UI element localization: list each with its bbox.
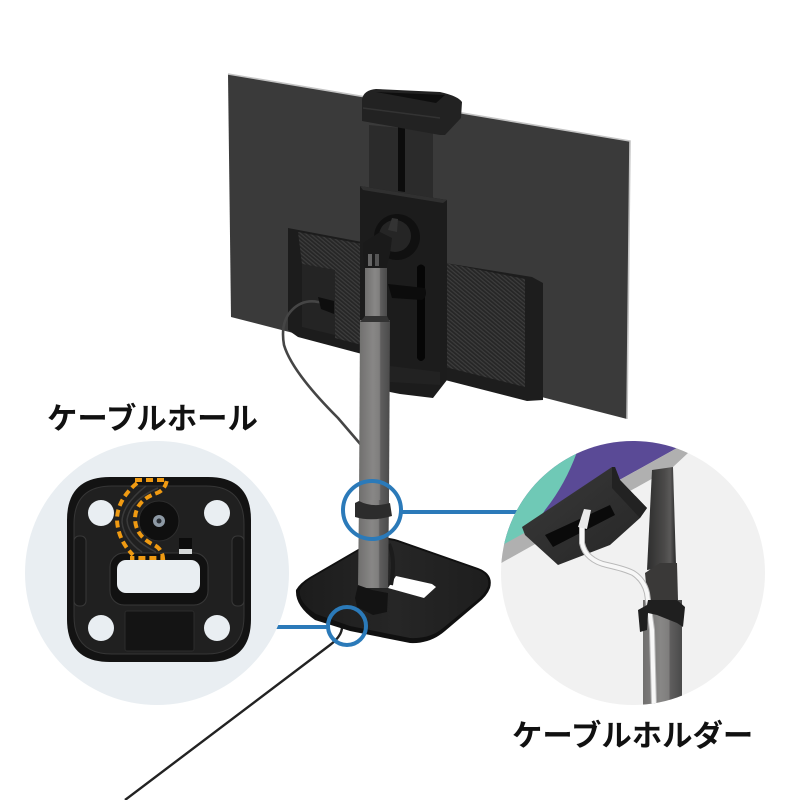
cable behind pole bbox=[389, 544, 393, 585]
cable plug bbox=[318, 297, 334, 314]
pole lower section bbox=[358, 500, 389, 588]
pole collar bbox=[360, 316, 390, 322]
pole middle section bbox=[359, 320, 390, 500]
heading: cable hole: ケーブルホール bbox=[47, 401, 258, 436]
tablet teal wallpaper bbox=[504, 454, 576, 546]
panel: cable hole detail bbox=[25, 441, 289, 705]
callout: cable hole marker and connector bbox=[275, 607, 366, 645]
tablet holder bbox=[522, 467, 647, 565]
right holder with carbon pattern bbox=[445, 263, 543, 401]
mount plate bbox=[360, 186, 447, 398]
stand pole upper bbox=[647, 467, 676, 570]
stand base bbox=[296, 538, 491, 643]
orange dashed cable route bbox=[117, 480, 167, 558]
circle background bbox=[25, 441, 289, 705]
cable plug bbox=[578, 509, 591, 529]
base underside plate bbox=[67, 477, 251, 662]
panel: cable holder detail bbox=[501, 441, 765, 705]
ball joint bbox=[363, 214, 420, 268]
monitor back panel bbox=[228, 74, 630, 419]
monitor on stand bbox=[125, 74, 630, 800]
left holder with carbon pattern bbox=[288, 228, 362, 354]
pole upper section bbox=[365, 268, 387, 318]
base cable bbox=[125, 627, 342, 800]
white charging cable bbox=[582, 527, 654, 706]
monitor cable bbox=[283, 301, 362, 446]
tablet edge bbox=[501, 448, 688, 563]
circle background bbox=[501, 441, 765, 705]
heading: cable holder: ケーブルホルダー bbox=[512, 718, 753, 753]
stand pole lower bbox=[643, 600, 682, 706]
cable holder strap bbox=[355, 501, 392, 519]
pole foot bbox=[355, 585, 388, 615]
tablet screen bbox=[504, 441, 676, 544]
collar bbox=[645, 563, 678, 600]
callout: cable holder marker and connector bbox=[343, 481, 520, 539]
cable clip bbox=[638, 600, 685, 632]
slider arm bbox=[369, 125, 433, 200]
top clamp bbox=[362, 89, 462, 135]
